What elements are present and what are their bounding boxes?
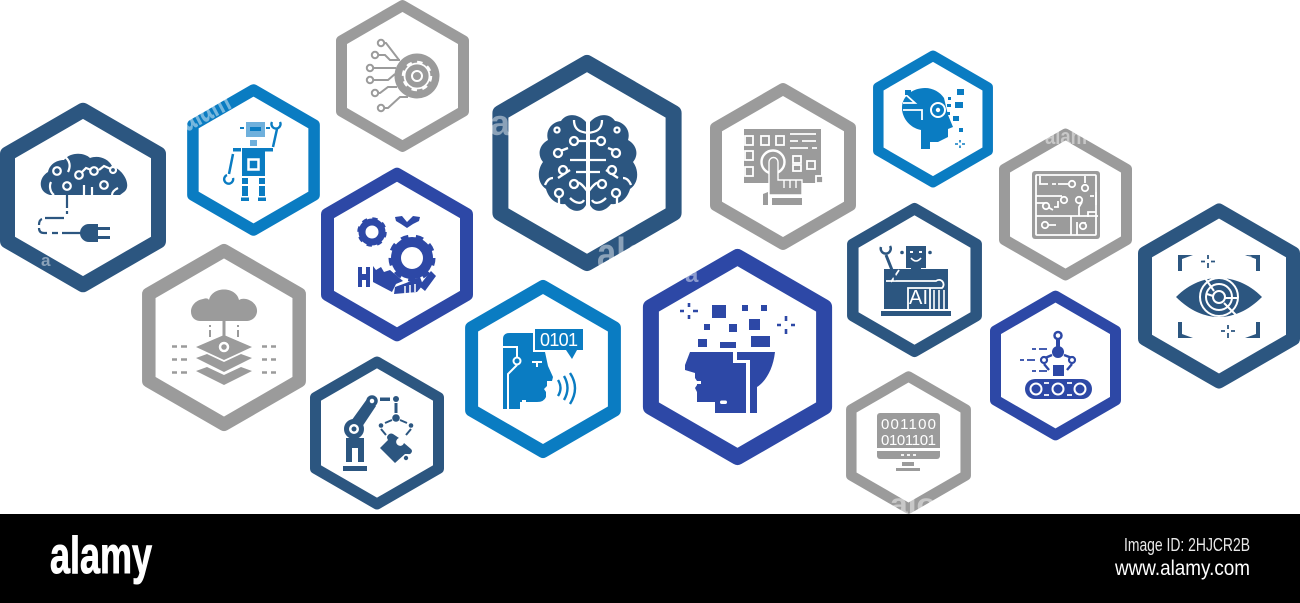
- icon: gear with circuit lines: [367, 40, 440, 111]
- panel: circuit gear: [342, 6, 464, 146]
- icon: cloud brain and plug: [39, 154, 127, 242]
- icon: head with visor and pixels: [902, 88, 965, 149]
- hexagon frame: [500, 63, 674, 263]
- icon: circuit board chip: [1032, 171, 1100, 239]
- icon: scanned eye: [1176, 255, 1262, 338]
- hexagon frame: [996, 296, 1116, 435]
- icon: cloud over stacked layers: [172, 290, 276, 385]
- icon: robot arm and puzzle piece: [343, 396, 413, 471]
- hexagon frame: [149, 251, 299, 424]
- icon: brain with circuits: [539, 115, 637, 211]
- icon: hand and gears: [358, 216, 436, 294]
- icon: robot typing on laptop: [881, 246, 951, 316]
- hexagon frame: [853, 209, 976, 351]
- hexagon frame: [651, 257, 824, 457]
- hexagon frame: [1145, 210, 1293, 382]
- hexagon frame: [193, 90, 314, 230]
- watermark fragments: a: [1246, 251, 1253, 265]
- hexagon frame: [851, 376, 966, 508]
- watermark fragments: alo: [890, 488, 936, 521]
- panel: cloud layers: [149, 251, 299, 424]
- panel: binary monitor: [851, 376, 966, 508]
- panel: cloud brain with plug: [8, 110, 158, 285]
- icon: head with binary speech bubble: 0101: [540, 330, 578, 350]
- watermark fragments: alam: [171, 77, 237, 140]
- hexagon frame: [328, 174, 466, 335]
- watermark fragments: a: [490, 102, 511, 143]
- footer: image id: Image ID: 2HJCR2B: [1124, 535, 1250, 555]
- hexagon frame: [472, 286, 614, 452]
- icon: robot arm over conveyor belt: [1020, 332, 1092, 399]
- icon: robot typing on laptop: AI: [909, 287, 928, 309]
- panel: AI robot on laptop: [853, 209, 976, 351]
- panel: circuit chip: [1004, 134, 1126, 275]
- panel: hand holding gears: [328, 174, 466, 335]
- panel: robot with wrenches: [193, 90, 314, 230]
- watermark fragments: alam: [1045, 124, 1087, 149]
- watermark fragments: [41, 77, 1253, 521]
- panel: speaking AI head: [472, 286, 614, 452]
- panel: data head: [651, 257, 824, 457]
- hexagon frame: [1004, 134, 1126, 275]
- hexagon frame: [342, 6, 464, 146]
- panel: conveyor robot: [996, 296, 1116, 435]
- footer: website: www.alamy.com: [1114, 557, 1250, 580]
- panel: robot arm with puzzle piece: [316, 362, 438, 504]
- panel: eye scanner: [1145, 210, 1293, 382]
- footer logo: alamy: alamy: [50, 527, 152, 585]
- icon: monitor with binary code: [877, 413, 940, 471]
- icon: finger pressing circuit panel: [744, 129, 823, 205]
- hexagon frame: [716, 89, 850, 244]
- icon: monitor with binary code: 001100: [881, 416, 936, 433]
- watermark fragments: alo: [597, 229, 647, 278]
- footer bar: [0, 514, 1300, 603]
- panel: circuit brain: [500, 63, 674, 263]
- watermark fragments: a: [685, 261, 699, 288]
- hexagon frame: [316, 362, 438, 504]
- panel: cyber head: [878, 56, 988, 182]
- hexagon frame: [8, 110, 158, 285]
- watermark fragments: a: [41, 251, 51, 270]
- icon: head dissolving into pixels: [680, 303, 795, 413]
- icon: robot: [224, 122, 280, 201]
- hexagon frame: [878, 56, 988, 182]
- panel: touch screen: [716, 89, 850, 244]
- icon: head with binary speech bubble: [503, 329, 583, 409]
- icon: monitor with binary code: 0101101: [881, 432, 936, 449]
